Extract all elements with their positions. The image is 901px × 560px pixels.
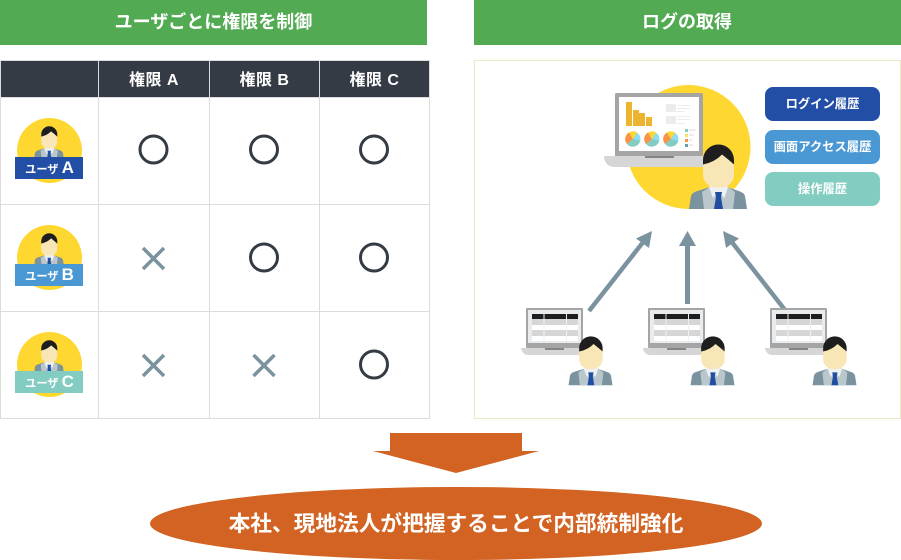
table header row xyxy=(0,60,430,98)
panel: log acquisition xyxy=(474,60,900,418)
user A row label: ユーザ A xyxy=(25,158,74,177)
allowed marks xyxy=(140,136,388,378)
legend: screen access history: 画面アクセス履歴 xyxy=(774,140,871,154)
table header row: 権限 A xyxy=(129,70,179,89)
user C row label xyxy=(15,332,83,397)
user C row label: ユーザ C xyxy=(25,372,74,391)
legend: login history: ログイン履歴 xyxy=(786,96,859,111)
arrow: right user to administrator xyxy=(723,231,785,310)
legend: operation history: 操作履歴 xyxy=(798,181,847,196)
denied marks xyxy=(143,248,274,376)
table header row: 権限 B xyxy=(239,70,290,89)
user B row label: ユーザ B xyxy=(25,265,74,284)
heading: permission control: ユーザごとに権限を制御 xyxy=(115,11,312,32)
arrow: down to conclusion xyxy=(373,433,539,473)
user B row label xyxy=(15,225,83,290)
legend: operation history xyxy=(765,172,880,206)
conclusion ellipse: 本社、現地法人が把握することで内部統制強化 xyxy=(229,511,684,536)
user terminal: right xyxy=(765,308,856,385)
heading: log acquisition: ログの取得 xyxy=(642,11,732,32)
user terminal: center xyxy=(643,308,734,385)
administrator with dashboard laptop xyxy=(604,85,750,209)
user A row label xyxy=(15,118,83,183)
heading: permission control xyxy=(0,0,427,45)
arrow: center user to administrator xyxy=(679,231,696,304)
user terminal: left xyxy=(521,308,612,385)
arrow: left user to administrator xyxy=(589,231,652,311)
permission table xyxy=(0,60,430,419)
legend: login history xyxy=(765,87,880,121)
table header row: 権限 C xyxy=(349,70,400,89)
heading: log acquisition xyxy=(474,0,901,45)
conclusion ellipse xyxy=(150,487,762,560)
legend: screen access history xyxy=(765,130,880,164)
laptop dashboard xyxy=(604,93,703,167)
